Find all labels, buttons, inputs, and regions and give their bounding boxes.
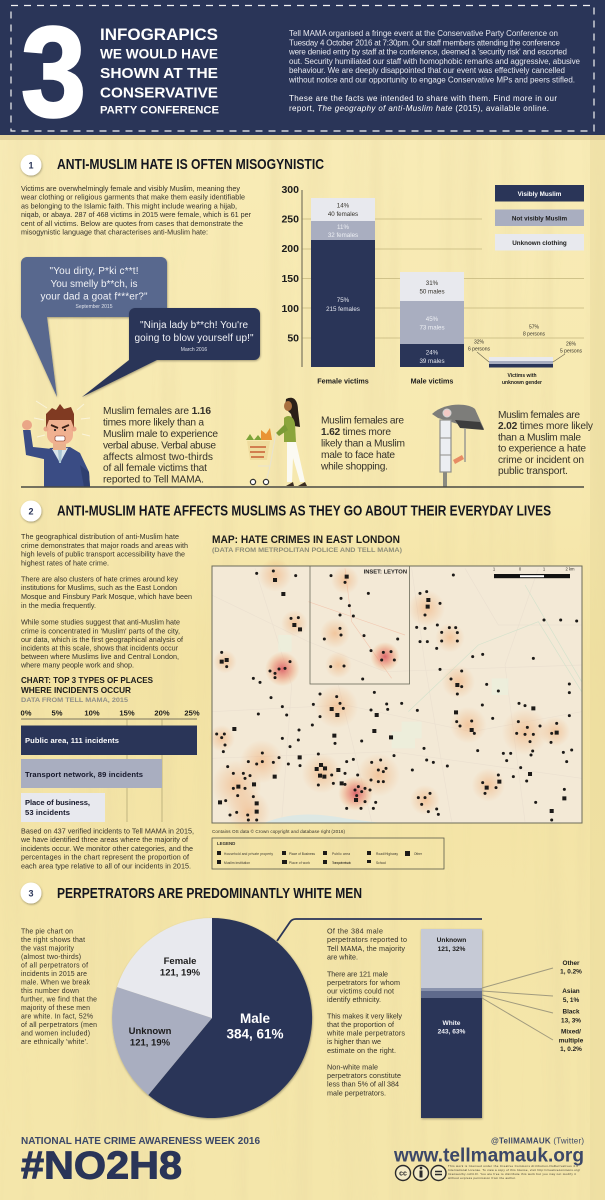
section 3 middle text: Of the 384 male xyxy=(327,927,383,936)
section 2 number badge xyxy=(20,500,42,522)
header intro text: without notice and our opportunity to engage Conservative MPs and peers stifled. xyxy=(288,76,575,84)
section 2 text: The geographical distribution of anti-Muslim hate xyxy=(21,532,179,541)
text: shopping statistic: male to face hate xyxy=(321,450,395,461)
section 3 middle text: are white. xyxy=(327,952,358,961)
section 3 left text: and women included) xyxy=(21,1030,90,1038)
icon: creative commons badges: cc xyxy=(399,1170,407,1178)
stacked bar: male perpetrators by ethnicity: Unknown xyxy=(437,937,466,944)
map scale bar: 0 xyxy=(519,566,522,572)
bar: unknown gender victims: 32% xyxy=(474,340,485,346)
section 3 middle text xyxy=(326,927,407,1097)
text: verbal abuse statistic: verbal abuse. Verbal abuse xyxy=(103,440,216,451)
map legend: Muslim institution xyxy=(224,861,250,865)
licence note xyxy=(448,1164,580,1180)
stacked bar: male perpetrators by ethnicity: 121, 32% xyxy=(438,946,466,953)
ethnic group labels: 13, 3% xyxy=(561,1018,581,1024)
map legend: Household and private property xyxy=(224,852,273,856)
section 3 left text: are white. In fact, 52% xyxy=(21,1014,93,1020)
map inset: Leyton xyxy=(310,566,410,684)
map legend: School xyxy=(376,861,386,865)
chart title: CHART: TOP 3 TYPES OF PLACES xyxy=(21,675,153,685)
map scale bar: 1 xyxy=(493,566,496,572)
chart legend: Unknown clothing xyxy=(512,240,567,247)
section 3 left text: incidents in 2015 are xyxy=(21,971,87,978)
bar: male victims xyxy=(400,272,464,367)
section 3 number badge: 3 xyxy=(28,888,34,898)
text: public transport statistic: 2.02 times more likely xyxy=(498,421,594,432)
section 3 heading: PERPETRATORS ARE PREDOMINANTLY WHITE MEN xyxy=(57,885,362,902)
icon: creative commons badges xyxy=(396,1166,446,1180)
map credit: Contains OS data © Crown copyright and database right (2016) xyxy=(212,828,345,834)
section 3 left text: the right shows that xyxy=(21,937,85,944)
chart title: DATA FROM TELL MAMA, 2015 xyxy=(21,697,129,704)
bar chart: top 3 incident locations xyxy=(21,708,200,822)
text: public transport statistic: than a Muslim male xyxy=(498,432,581,443)
section 3 middle text: estimate on the right. xyxy=(327,1046,396,1055)
chart legend: Visibly Muslim xyxy=(518,191,562,198)
chart note: we have identified three areas where the majority of xyxy=(20,835,188,844)
chart axis labels: 50 xyxy=(287,332,299,344)
chart legend: Not visibly Muslim xyxy=(512,216,568,222)
map roads and river xyxy=(212,568,582,822)
section 1 number badge: 1 xyxy=(28,160,34,170)
map legend: Place of work xyxy=(289,861,310,865)
text: verbal abuse statistic xyxy=(103,406,218,486)
section 3 middle text: Tell MAMA, the majority xyxy=(327,944,405,953)
speech bubble: September 2015: You smelly b**ch, is xyxy=(50,279,138,290)
section 2 text: crime is concentrated in 'Muslim' parts of the city, xyxy=(21,626,180,635)
bar: male victims: 24% xyxy=(426,350,439,356)
header banner xyxy=(0,0,605,144)
icon: woman with shopping trolley xyxy=(246,398,307,486)
pie chart: perpetrators by gender: Male xyxy=(240,1011,270,1026)
chart axis labels xyxy=(281,184,299,344)
section 3 middle text: perpetrators constitute xyxy=(327,1071,401,1080)
bar: female victims: 14% xyxy=(337,202,350,210)
map legend: LEGEND xyxy=(217,841,235,846)
speech bubble: September 2015 xyxy=(21,257,167,397)
text: verbal abuse statistic: Muslim male to experience xyxy=(103,429,218,440)
chart category labels: Victims with xyxy=(507,373,537,379)
header title: PARTY CONFERENCE xyxy=(100,104,219,116)
section 2 text: crime demonstrates that major roads and areas with xyxy=(21,541,188,550)
bar: female victims: 75% xyxy=(337,297,350,304)
section 2 text: There are also clusters of hate crimes around key xyxy=(21,574,178,583)
section 3 left text: further, we find that the xyxy=(21,996,97,1004)
speech bubble: March 2016: going to blow yourself up!" xyxy=(134,333,254,344)
chart axis labels: 150 xyxy=(281,273,299,285)
chart category labels: Female victims xyxy=(317,376,369,386)
footer xyxy=(21,1135,584,1188)
connector: pie to stacked bar xyxy=(277,919,482,941)
map title xyxy=(212,534,402,554)
pie slice: female xyxy=(117,918,212,1018)
text: public transport statistic: Muslim females are xyxy=(498,410,580,421)
section 3 middle text: perpetrators for whom xyxy=(327,978,400,987)
section 1 intro text: as belonging to the Islamic faith. This might include wearing a hijab, xyxy=(21,201,237,210)
section 3 left text: (almost two-thirds) xyxy=(21,954,81,961)
header title: SHOWN AT THE xyxy=(100,65,218,82)
section 1 heading: ANTI-MUSLIM HATE IS OFTEN MISOGYNISTIC xyxy=(57,156,324,173)
chart legend xyxy=(495,185,584,250)
section 2 text: While some studies suggest that anti-Muslim hate xyxy=(21,618,180,627)
chart percentage axis: 0% xyxy=(21,708,32,718)
chart axis labels: 300 xyxy=(281,184,299,196)
chart note: percentages in the chart represent the proportion of xyxy=(21,853,189,862)
chart title xyxy=(21,675,153,704)
licence note: International License. To view a copy of this license, visit http://creativecommons.org/ xyxy=(448,1168,580,1172)
section 2 text: our data, which is the first geographical analysis of xyxy=(21,635,183,644)
ethnic group labels: multiple xyxy=(559,1038,584,1044)
section 2 number badge: 2 xyxy=(28,506,34,516)
section 3 left text xyxy=(21,928,97,1046)
section 3 left text: the vast majority xyxy=(21,946,75,952)
pie chart: perpetrators by gender: 384, 61% xyxy=(226,1026,284,1042)
chart percentage axis: 25% xyxy=(184,708,200,718)
header intro text: These are the facts we intended to share with them. Find more in our xyxy=(289,94,557,103)
header intro text xyxy=(288,29,581,113)
speech bubble: September 2015: September 2015 xyxy=(76,304,113,310)
chart category labels: Male victims xyxy=(411,376,453,386)
section 3 left text: are ethnically 'white'. xyxy=(21,1039,88,1046)
section 1 intro text: niqab, or abaya. 287 of 468 victims in 2015 were female, which is 61 per xyxy=(21,210,252,219)
bar: male victims: 31% xyxy=(426,280,439,287)
bar: male victims: 50 males xyxy=(419,288,445,296)
text: shopping statistic: 1.62 times more xyxy=(321,427,391,438)
section 2 text: Mosque and Finsbury Park Mosque, which have been xyxy=(21,592,192,601)
bar chart: victims by gender and clothing xyxy=(281,184,584,386)
section 3 left text: of all perpetrators of xyxy=(21,962,88,970)
pie slice: male xyxy=(148,918,312,1118)
speech bubble: September 2015: your dad a goat f***er?" xyxy=(40,292,148,302)
licence note: licenses/by-nd/4.0/. You are free to distribute this work but you may not modify it xyxy=(448,1172,576,1176)
bar: female victims: 40 females xyxy=(328,211,358,218)
section 3 middle text: is higher than we xyxy=(327,1037,381,1046)
map legend: Public area xyxy=(332,852,350,856)
section 1 intro text: wear clothing or religious garments that make them easily identifiable xyxy=(20,193,245,202)
section 1 intro text: cent of all victims. Below are quotes from cases that demonstrate the xyxy=(21,219,243,228)
map legend: Other xyxy=(414,852,423,856)
section 1 intro text: misogynistic language that characterises anti-Muslim hate: xyxy=(21,228,208,236)
header intro text: were denied entry by staff at the conference, deemed a 'security risk' and escorted xyxy=(288,48,567,57)
section 3 middle text: identify ethnicity. xyxy=(327,995,381,1004)
section 2 text: where many people work and shop. xyxy=(20,661,134,670)
text: verbal abuse statistic: of all female victims that xyxy=(103,463,207,474)
section 3 middle text: perpetrators reported to xyxy=(327,935,407,944)
text: verbal abuse statistic: times more likely than a xyxy=(103,418,204,428)
text: verbal abuse statistic: affects almost two-thirds xyxy=(103,452,213,463)
pie chart: perpetrators by gender: Female xyxy=(164,956,196,967)
section 3 middle text: less than 5% of all 384 xyxy=(327,1080,399,1089)
ethnic group labels: Black xyxy=(562,1008,580,1016)
section 2 text: institutions for Muslims, such as the East London xyxy=(21,583,177,592)
pie slice: unknown xyxy=(112,987,212,1095)
bar: transport network xyxy=(21,759,162,788)
chart percentage axis: 20% xyxy=(154,708,170,718)
chart note: Based on 437 verified incidents to Tell MAMA in 2015, xyxy=(21,826,194,836)
chart title: WHERE INCIDENTS OCCUR xyxy=(21,685,131,695)
map: hate crimes in East London xyxy=(208,558,582,833)
section 3 left text: of all perpetrators (men xyxy=(21,1022,97,1029)
stacked bar: male perpetrators by ethnicity xyxy=(421,929,482,1118)
pie chart: perpetrators by gender: 121, 19% xyxy=(160,968,201,978)
header title: CONSERVATIVE xyxy=(100,84,218,102)
bar: female victims: 11% xyxy=(337,224,349,231)
speech bubble: March 2016: "Ninja lady b**ch! You're xyxy=(140,320,248,331)
licence note: This work is licensed under the Creative Commons Attribution-NoDerivatives 4.0 xyxy=(448,1164,578,1168)
section 2 text: highest rates of hate crime. xyxy=(21,558,109,567)
section 1 number badge xyxy=(20,154,42,176)
chart percentage axis: 10% xyxy=(84,708,100,718)
bar: public area: Public area, 111 incidents xyxy=(25,736,119,745)
map title: MAP: HATE CRIMES IN EAST LONDON xyxy=(212,534,400,546)
section 2 text: high levels of public transport accessibility have the xyxy=(21,550,185,559)
speech bubble: September 2015: "You dirty, P*ki c**t! xyxy=(50,266,138,277)
chart percentage axis xyxy=(21,708,200,719)
twitter handle: @TellMAMAUK (Twitter) xyxy=(491,1136,584,1146)
website: www.tellmamauk.org xyxy=(393,1144,584,1166)
hashtag: #NO2H8 xyxy=(21,1144,182,1188)
text: public transport statistic: to experience a hate xyxy=(498,444,586,455)
section 3 middle text: that the proportion of xyxy=(327,1020,394,1029)
ethnic group labels: Mixed/ xyxy=(561,1028,581,1036)
section 3 middle text: our victims could not xyxy=(327,986,394,995)
text: public transport statistic xyxy=(498,410,594,477)
map title: (DATA FROM METRPOLITAN POLICE AND TELL MAMA) xyxy=(212,547,402,554)
section 3 middle text: Non-white male xyxy=(327,1063,378,1072)
section 3 left text: this number down xyxy=(21,988,79,995)
header intro text: Tell MAMA organised a fringe event at the Conservative Party Conference on xyxy=(289,29,558,38)
section 1 intro text: Victims are overwhelmingly female and visibly Muslim, meaning they xyxy=(21,184,240,193)
section 3 left text: male. When we break xyxy=(21,980,91,986)
map scale bar: 2 km xyxy=(565,566,575,572)
bar: transport network: Transport network, 89 incidents xyxy=(25,770,143,779)
section 2 xyxy=(20,500,582,870)
map inset: Leyton: INSET: LEYTON xyxy=(364,570,407,576)
text: verbal abuse statistic: Muslim females are 1.16 xyxy=(103,406,211,417)
chart category labels: unknown gender xyxy=(502,380,542,386)
chart percentage axis: 5% xyxy=(52,708,63,718)
bar: unknown gender victims: 6 persons xyxy=(468,346,490,352)
section 3 middle text: There are 121 male xyxy=(327,969,388,978)
section 2 text: in the media frequently. xyxy=(21,601,96,610)
map density heat spots xyxy=(208,558,570,833)
header intro text: behaviour. We are deeply disappointed that our event was effectively cancelled xyxy=(289,66,565,75)
chart note: incidents occur. We monitor other categories, and the xyxy=(21,844,193,853)
bar: male victims: 39 males xyxy=(419,358,445,365)
section 3 xyxy=(20,882,584,1118)
section 3 middle text: This makes it very likely xyxy=(327,1012,402,1021)
section 3 middle text: white male perpetrators xyxy=(326,1029,405,1038)
pie chart: perpetrators by gender xyxy=(112,918,312,1118)
header intro text: out. Security humiliated our staff with homophobic remarks and aggressive, abusive xyxy=(289,57,581,66)
header title: WE WOULD HAVE xyxy=(100,46,218,62)
ethnic group labels: Asian xyxy=(562,988,580,995)
section 2 text xyxy=(20,532,192,670)
section 3 left text: The pie chart on xyxy=(21,928,73,936)
bar: unknown gender victims: 26% xyxy=(566,342,577,348)
text: verbal abuse statistic: reported to Tell MAMA. xyxy=(103,475,204,486)
speech bubble: March 2016 xyxy=(82,308,260,397)
bar: place of business: 53 incidents xyxy=(25,808,70,817)
ethnic group labels xyxy=(559,960,584,1053)
header title xyxy=(100,25,219,116)
bar: public area xyxy=(21,726,197,755)
map legend: Road/Highway xyxy=(376,852,398,856)
text: shopping statistic: likely than a Muslim xyxy=(321,438,405,450)
text: public transport statistic: crime or incident on xyxy=(498,455,584,466)
text: public transport statistic: public transport. xyxy=(498,466,568,477)
bar: unknown gender victims: 57% xyxy=(529,324,540,330)
chart percentage axis: 15% xyxy=(119,708,135,718)
header title: INFOGRAPICS xyxy=(100,25,218,44)
speech bubble: March 2016: March 2016 xyxy=(181,347,207,353)
bar: female victims: 215 females xyxy=(326,306,360,313)
chart category labels xyxy=(317,373,542,386)
licence note: without express permission from the author. xyxy=(448,1176,516,1180)
bar: unknown gender victims: 5 persons xyxy=(560,348,582,354)
big number 3: 3 xyxy=(21,1,86,144)
section 1 xyxy=(20,154,594,487)
bar: unknown gender victims: 8 persons xyxy=(523,332,545,338)
chart axis labels: 250 xyxy=(281,214,299,226)
bar: unknown gender victims xyxy=(468,324,582,368)
pie chart: perpetrators by gender: Unknown xyxy=(129,1026,172,1037)
chart note xyxy=(20,826,194,870)
bar: female victims: 32 females xyxy=(328,232,358,239)
bar: place of business xyxy=(21,793,105,822)
bar: place of business: Place of business, xyxy=(25,798,90,807)
pie chart: perpetrators by gender: 121, 19% xyxy=(130,1038,171,1048)
section 2 text: between where Muslims live and Central London, xyxy=(21,652,179,661)
ethnic group labels: 1, 0.2% xyxy=(560,968,582,976)
icon: angry man xyxy=(22,401,90,487)
bar: female victims xyxy=(311,198,375,367)
map legend xyxy=(212,838,444,869)
section 3 middle text: male perpetrators. xyxy=(327,1088,386,1097)
text: shopping statistic: while shopping. xyxy=(320,461,388,472)
icon: bus stop xyxy=(432,405,484,487)
chart axis labels: 100 xyxy=(281,303,299,315)
bar: male victims: 73 males xyxy=(419,324,445,332)
map legend: Place of Business xyxy=(289,852,315,856)
fan lines: small ethnic groups xyxy=(482,968,553,1040)
section 2 text: incidents at this scale, shows that incidents occur xyxy=(21,644,179,652)
section 1 intro text xyxy=(20,184,252,236)
bar: male victims: 45% xyxy=(426,316,439,323)
ethnic group labels: 1, 0.2% xyxy=(560,1046,582,1053)
text: shopping statistic: Muslim females are xyxy=(321,416,404,426)
map scale bar: 1 xyxy=(543,566,546,572)
footer campaign title: NATIONAL HATE CRIME AWARENESS WEEK 2016 xyxy=(21,1135,260,1147)
map legend: Transport network xyxy=(332,861,351,865)
text: shopping statistic xyxy=(320,416,405,472)
header intro text: report, The geography of anti-Muslim hate (2015), available online. xyxy=(289,104,549,113)
stacked bar: male perpetrators by ethnicity: White xyxy=(443,1020,461,1027)
section 3 left text: majority of these men xyxy=(21,1005,90,1012)
header intro text: Tuesday 4 October 2016 at 7:30pm. Our staff members attending the conference xyxy=(289,38,561,47)
ethnic group labels: 5, 1% xyxy=(563,997,579,1004)
map scale bar xyxy=(493,566,575,578)
stacked bar: male perpetrators by ethnicity: 243, 63% xyxy=(438,1028,466,1036)
chart note: each area type relative to all of our incidents in 2015. xyxy=(21,861,191,870)
ethnic group labels: Other xyxy=(562,960,580,967)
map incident markers xyxy=(217,571,577,820)
section 3 number badge xyxy=(20,882,42,904)
chart axis labels: 200 xyxy=(281,243,299,255)
